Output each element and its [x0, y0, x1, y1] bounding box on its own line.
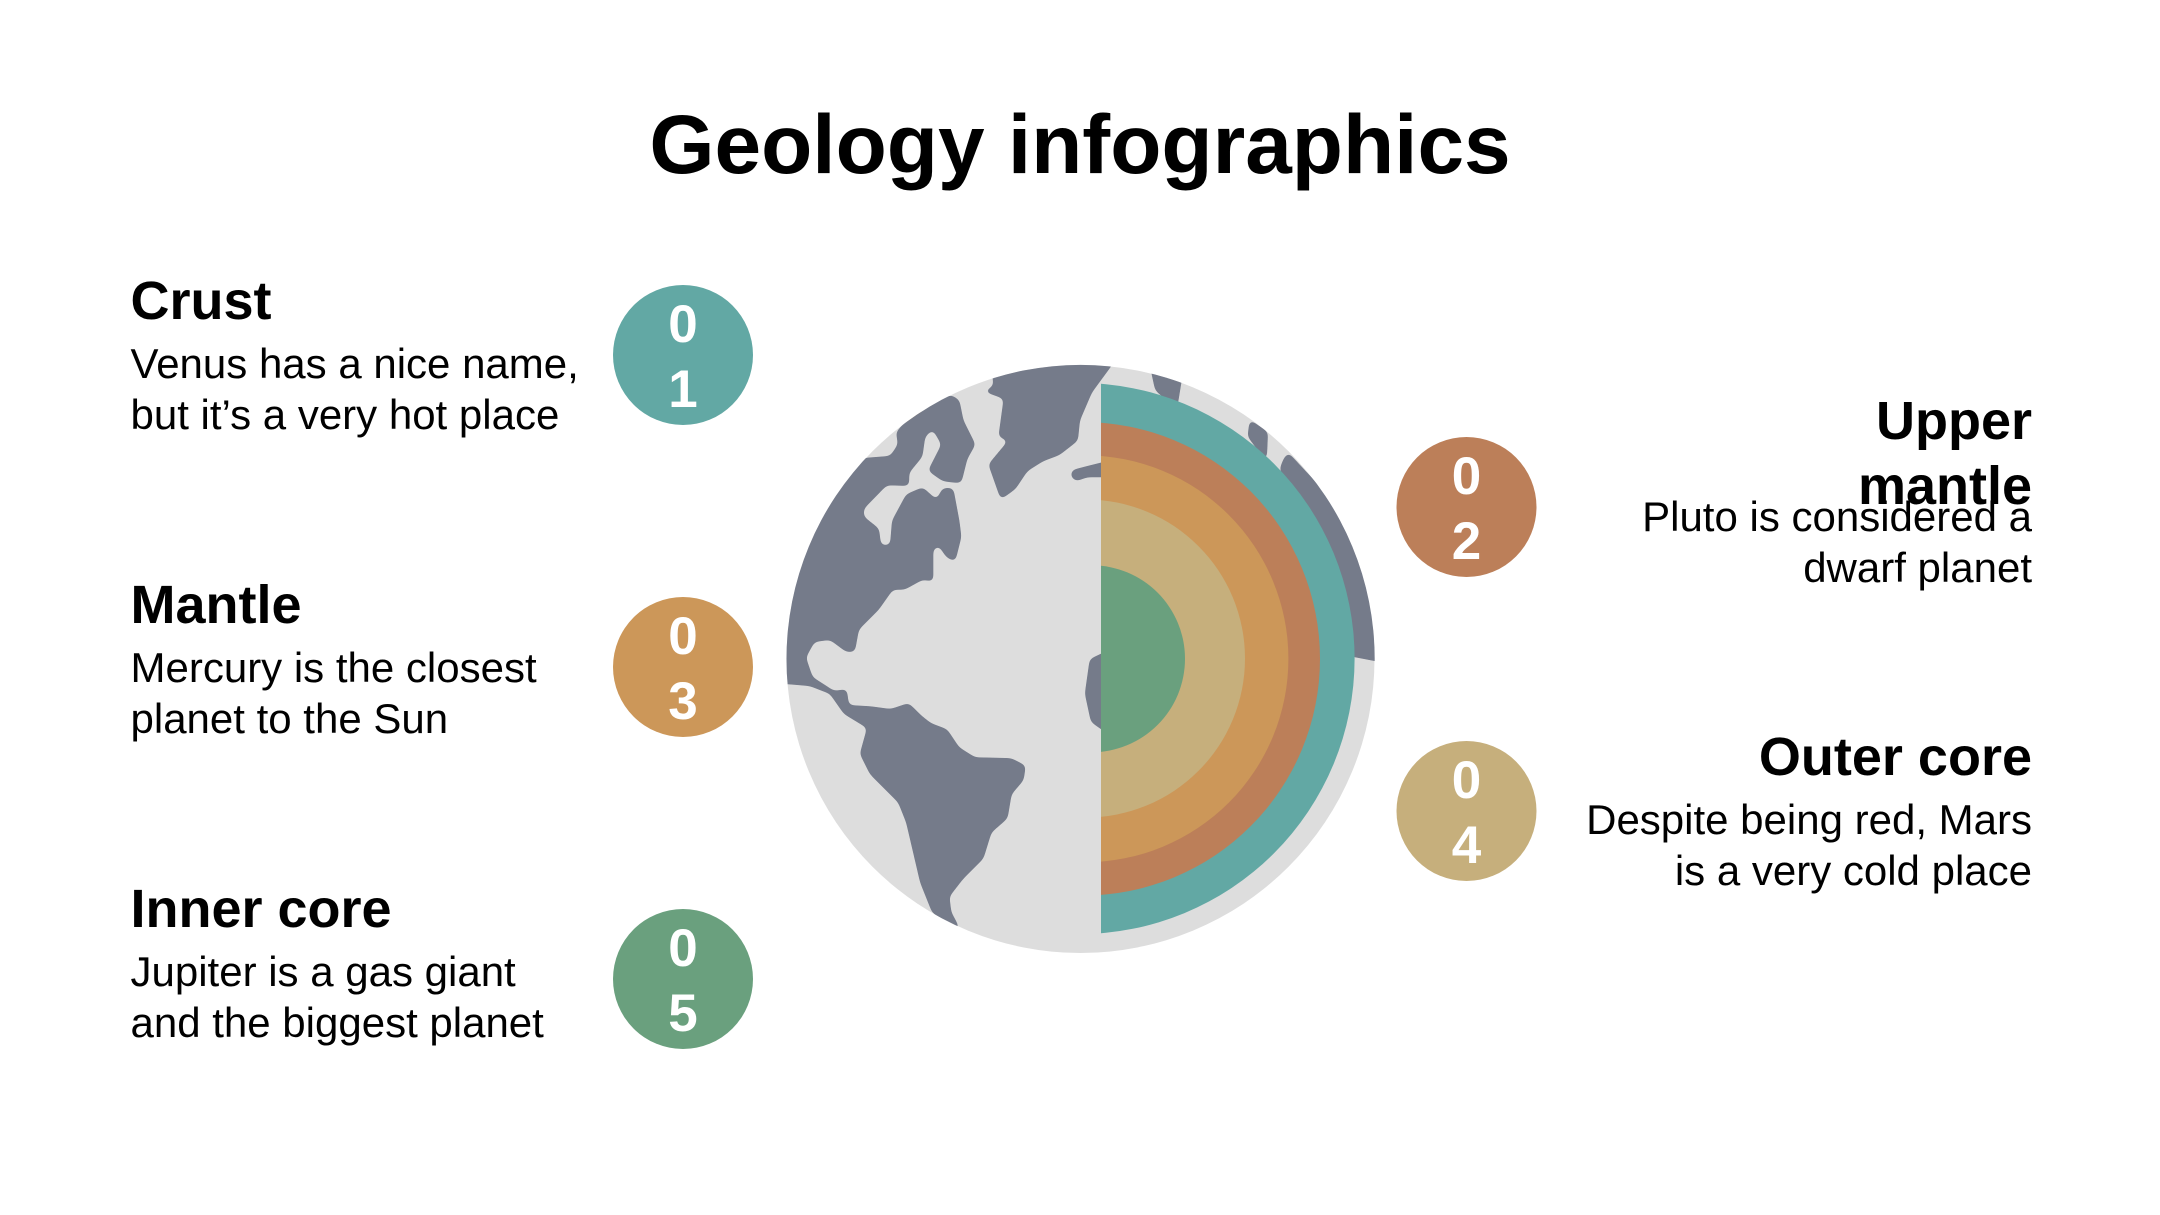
- globe illustration: [786, 364, 1375, 953]
- earth layers cross-section: [1101, 384, 1355, 934]
- description: crust: Venus has a nice name,: [130, 340, 579, 387]
- globe base: [786, 365, 1374, 953]
- badge 04: 4: [1452, 816, 1482, 875]
- description: upper mantle: dwarf planet: [1803, 544, 2032, 591]
- description: crust: but it’s a very hot place: [130, 391, 559, 438]
- item 04: outer core: [1396, 727, 2032, 894]
- description: inner core: and the biggest planet: [130, 999, 544, 1046]
- title: Geology infographics: [649, 97, 1511, 191]
- item 03: mantle: [130, 575, 753, 742]
- badge 03: 3: [668, 672, 698, 731]
- continents: [786, 364, 1375, 926]
- badge 04: [1396, 741, 1536, 881]
- badge 01: [613, 285, 753, 425]
- heading: inner core: Inner core: [130, 879, 392, 939]
- badge 01: 0: [668, 295, 698, 354]
- heading: crust: Crust: [130, 271, 272, 331]
- badge 02: [1396, 437, 1536, 577]
- description: upper mantle: Pluto is considered a: [1642, 493, 2033, 540]
- heading: upper mantle: Upper: [1876, 391, 2032, 451]
- badge 04: 0: [1452, 751, 1481, 810]
- heading: outer core: Outer core: [1759, 727, 2032, 787]
- description: outer core: is a very cold place: [1675, 847, 2032, 894]
- description: inner core: Jupiter is a gas giant: [130, 948, 516, 995]
- description: mantle: Mercury is the closest: [130, 644, 537, 691]
- description: mantle: planet to the Sun: [130, 695, 448, 742]
- badge 05: 0: [668, 919, 698, 978]
- heading: upper mantle: mantle: [1858, 456, 2032, 516]
- badge 05: 5: [668, 984, 698, 1043]
- item 02: upper mantle: [1396, 391, 2033, 591]
- description: outer core: Despite being red, Mars: [1586, 796, 2032, 843]
- badge 02: 0: [1452, 447, 1481, 506]
- badge 02: 2: [1452, 512, 1481, 571]
- badge 03: [613, 597, 753, 737]
- badge 05: [613, 909, 753, 1049]
- heading: mantle: Mantle: [130, 575, 302, 635]
- badge 03: 0: [668, 607, 698, 666]
- item 05: inner core: [130, 879, 753, 1049]
- badge 01: 1: [668, 360, 698, 419]
- item 01: crust: [130, 271, 753, 438]
